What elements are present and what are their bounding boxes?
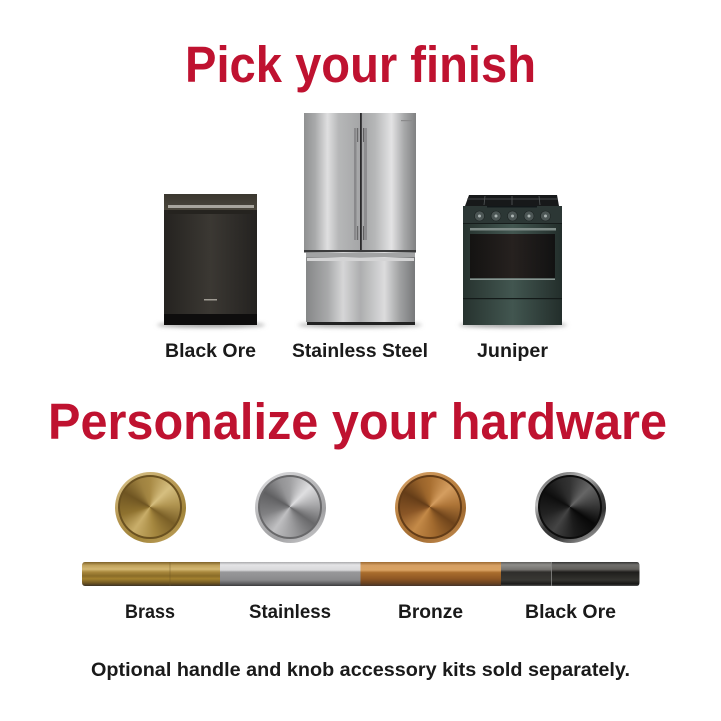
label: Stainless Steel: Stainless Steel — [292, 341, 428, 362]
label: Bronze: Bronze — [398, 602, 463, 623]
knob: Brass — [114, 472, 186, 542]
footnote: Optional handle and knob accessory kits sold separately. — [91, 659, 630, 681]
label: Black Ore finish: Black Ore — [525, 602, 616, 623]
appliance: Stainless Steel refrigerator — [298, 113, 422, 328]
knob: Bronze — [394, 472, 466, 542]
label: Brass: Brass — [125, 602, 175, 623]
title: Pick your finish: Pick your finish — [185, 36, 536, 93]
hardware handle bar — [82, 562, 640, 586]
appliance: Juniper range — [459, 195, 567, 328]
knob: Stainless — [254, 472, 326, 542]
knob: Black Ore — [534, 472, 606, 542]
appliance: Black Ore dishwasher — [157, 194, 265, 328]
label: Juniper: Juniper — [477, 341, 549, 362]
label: Black Ore: Black Ore — [165, 341, 256, 362]
label: Stainless: Stainless — [249, 602, 331, 623]
heading: Personalize your hardware: Personalize your hardware — [48, 393, 667, 450]
